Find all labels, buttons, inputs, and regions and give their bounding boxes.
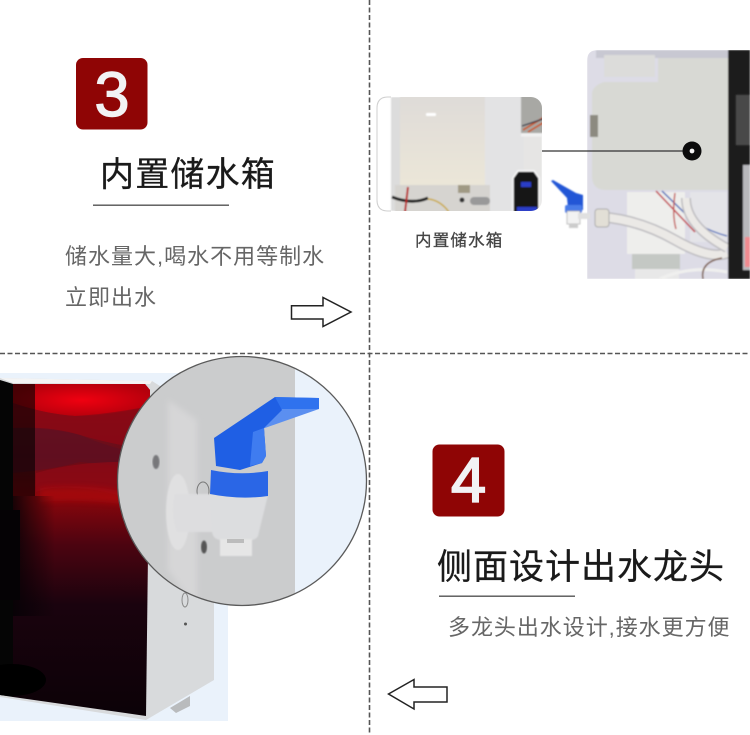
inset detail photo — [390, 97, 542, 211]
description text: 立即出水 — [65, 285, 157, 310]
stand shadow — [0, 664, 46, 696]
panel: side faucet photo — [0, 350, 375, 721]
chassis cutaway photo — [587, 50, 750, 279]
inset border left arc — [377, 97, 391, 211]
device top highlight — [0, 378, 152, 384]
white faucet pipe — [191, 493, 214, 532]
number badge 4: 4 — [451, 446, 486, 516]
black side bezel — [0, 380, 13, 697]
blue handle — [262, 397, 319, 429]
small blue tap — [551, 180, 590, 228]
number badge 3: 3 — [94, 60, 130, 130]
panel: built-in water tank text — [65, 58, 351, 326]
heading underline — [439, 596, 575, 597]
heading underline — [93, 204, 229, 206]
number badge 4 — [432, 444, 504, 516]
side dot — [184, 622, 187, 626]
vertical dashed divider — [368, 0, 370, 735]
heading: side faucet design: 侧面设计出水龙头 — [437, 548, 725, 587]
heading: built-in water tank: 内置储水箱 — [100, 156, 276, 194]
filter cartridge — [627, 192, 685, 254]
arrow right — [292, 298, 351, 326]
device silver body — [0, 378, 214, 720]
inset caption: 内置储水箱 — [415, 231, 504, 250]
leader line — [542, 150, 692, 152]
panel: side faucet text — [388, 444, 730, 709]
horizontal dashed divider — [0, 352, 750, 354]
description text: 储水量大,喝水不用等制水 — [65, 244, 325, 269]
magnifier circle with faucet — [118, 350, 375, 620]
panel: tank photo — [372, 50, 750, 279]
red front panel — [13, 384, 150, 716]
description text: 多龙头出水设计,接水更方便 — [448, 615, 730, 640]
side hole — [182, 593, 188, 607]
light blue backdrop — [0, 373, 228, 721]
wall recess — [170, 406, 195, 595]
mount holes — [152, 455, 160, 469]
blue collar — [210, 470, 268, 498]
tubes — [602, 217, 727, 255]
device bottom feet — [170, 696, 190, 713]
wires — [656, 191, 695, 232]
dark front cover — [728, 50, 750, 279]
number badge 3 — [76, 58, 148, 130]
white faucet body — [210, 495, 268, 540]
tank body — [592, 58, 728, 190]
marker dot — [682, 142, 702, 160]
arrow left — [388, 680, 447, 709]
